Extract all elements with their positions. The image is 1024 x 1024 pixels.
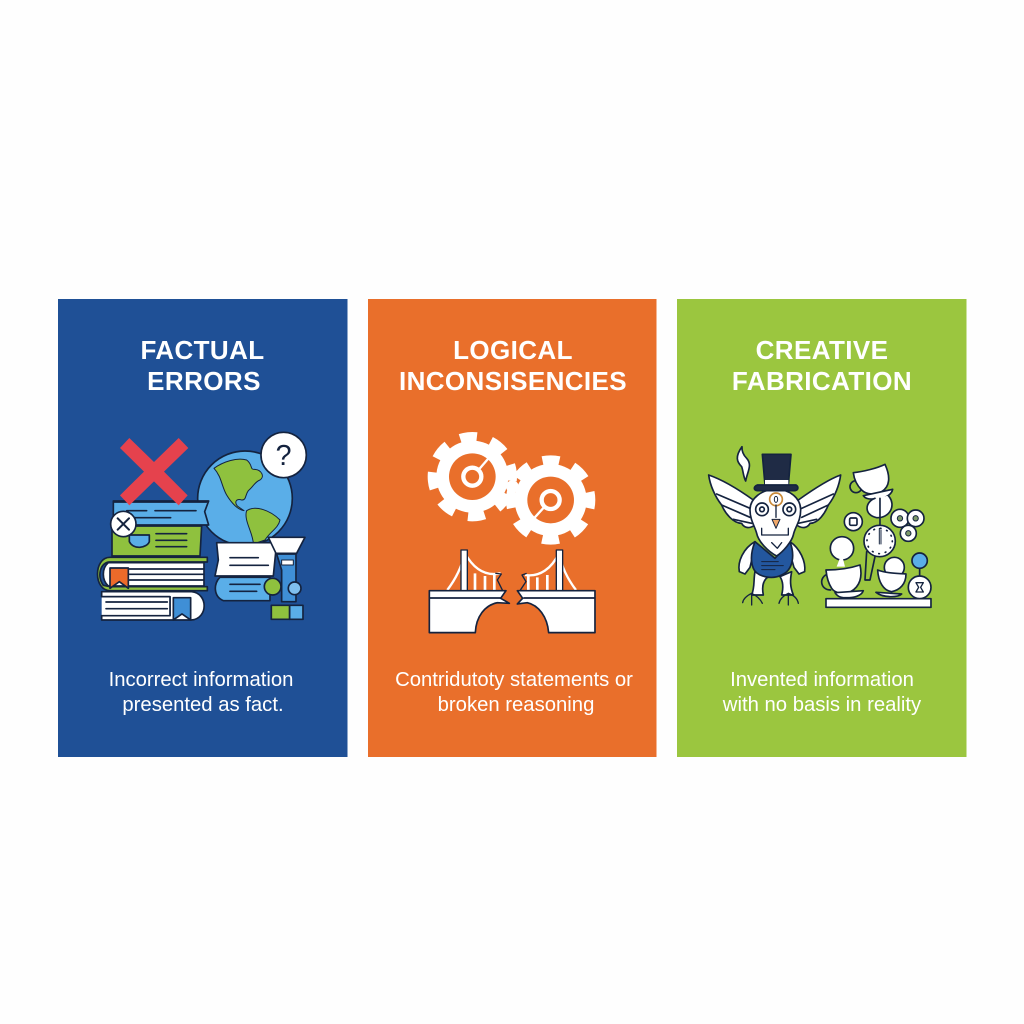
description: creative fabrication: Invented information: [730, 669, 914, 691]
icon: smoke wisp: [737, 447, 749, 481]
icon: open book right: [215, 543, 277, 601]
icon: cup with ball: [822, 537, 863, 598]
icon: middle book: [97, 557, 207, 591]
panel: creative fabrication: [677, 299, 966, 757]
icon: left gear: [429, 433, 516, 520]
heading: creative fabrication: CREATIVE: [756, 335, 888, 365]
description: factual errors: Incorrect information: [109, 669, 293, 691]
icon: books, globe and red cross: [97, 432, 306, 620]
description: logical inconsistencies: Contridutoty statements or: [395, 669, 633, 691]
heading: logical inconsistencies: LOGICAL: [453, 335, 573, 365]
icon: question bubble: ?: [276, 440, 292, 472]
icon: right gear: [511, 461, 590, 539]
icon: top book: [112, 501, 209, 556]
description: creative fabrication: with no basis in reality: [722, 694, 922, 716]
icon: bottom book: [102, 592, 204, 620]
icon: cluster of ovals: [891, 509, 924, 541]
icon: creature: [709, 475, 841, 605]
icon: flask and blocks: [264, 537, 305, 619]
panel: factual errors: [58, 299, 348, 757]
icon: left bridge half: [429, 550, 509, 633]
icon: top hat: [754, 454, 798, 491]
icon: right cup: [876, 557, 906, 597]
heading: factual errors: ERRORS: [147, 366, 261, 396]
icon: x badge: [111, 511, 136, 537]
icon: small square coin: [844, 513, 862, 531]
icon: gear connector: [506, 480, 519, 493]
icon: gears and broken bridge: [429, 433, 595, 633]
icon: winged creature and floating teacups: [709, 447, 931, 607]
icon: red cross: [120, 438, 188, 505]
panel: logical inconsistencies: [368, 299, 656, 757]
icon: top teacup: [850, 464, 893, 527]
description: logical inconsistencies: broken reasoning: [438, 694, 594, 716]
icon: blue ball and coin: [908, 553, 931, 599]
icon: question bubble: [261, 432, 306, 478]
description: factual errors: presented as fact.: [122, 694, 284, 716]
heading: logical inconsistencies: INCONSISENCIES: [399, 366, 627, 396]
icon: right bridge half: [517, 550, 595, 633]
icon: shelf: [826, 599, 931, 607]
heading: factual errors: FACTUAL: [140, 335, 265, 365]
icon: globe: [198, 451, 292, 546]
heading: creative fabrication: FABRICATION: [732, 366, 912, 396]
icon: clock: [864, 525, 895, 580]
